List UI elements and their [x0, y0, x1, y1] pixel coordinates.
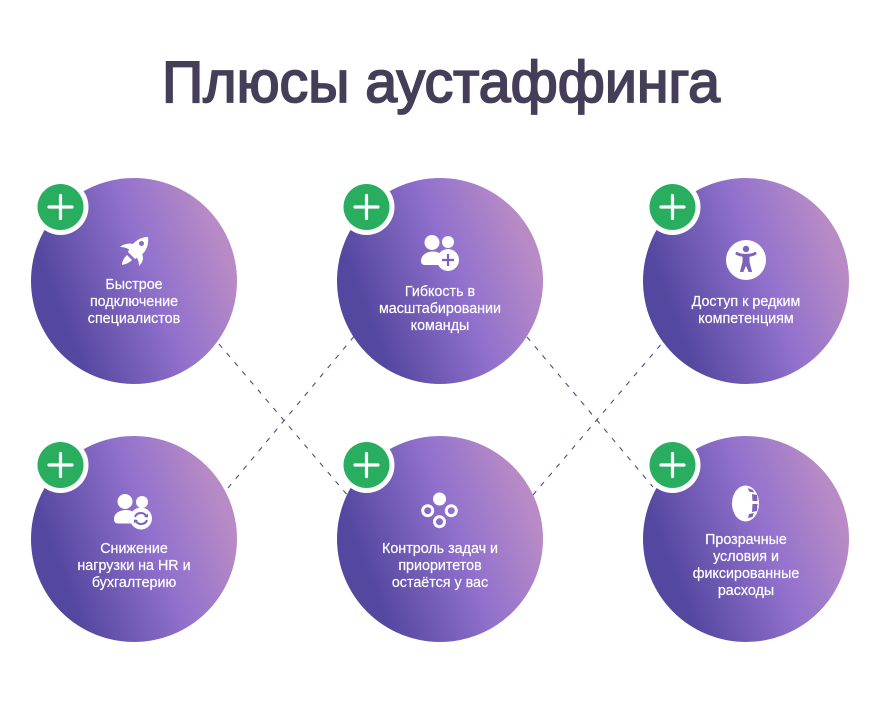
text: scaling flexibility: Гибкость в — [405, 284, 475, 300]
dashed connector lines — [219, 334, 663, 497]
panel: fast onboarding — [31, 178, 237, 384]
text: fast onboarding: подключение — [90, 294, 178, 310]
text: transparent costs: условия и — [713, 549, 779, 565]
text: rare competencies: Доступ к редким — [692, 294, 800, 310]
text: fast onboarding: специалистов — [88, 311, 180, 327]
icon: accessibility figure — [726, 240, 766, 280]
text: reduced HR load: бухгалтерию — [92, 575, 176, 591]
text: transparent costs: расходы — [718, 583, 774, 599]
text: task control: приоритетов — [398, 558, 482, 574]
icon: plus badge — [32, 179, 88, 235]
text: scaling flexibility: команды — [411, 318, 469, 334]
title: Плюсы аустаффинга — [162, 50, 721, 115]
icon: plus badge — [644, 437, 700, 493]
text: rare competencies: компетенциям — [698, 311, 794, 327]
icon: four dots — [423, 494, 456, 527]
panel: reduced HR load — [31, 436, 237, 642]
text: reduced HR load: Снижение — [100, 541, 168, 557]
icon: rocket — [120, 237, 148, 266]
icon: plus badge — [644, 179, 700, 235]
panel: rare competencies — [643, 178, 849, 384]
panel: transparent costs — [643, 436, 849, 642]
icon: plus badge — [32, 437, 88, 493]
icon: coin — [732, 486, 759, 522]
panel: task control — [337, 436, 543, 642]
icon: people with refresh — [114, 494, 152, 530]
icon: people with plus — [421, 235, 459, 271]
icon: plus badge — [338, 437, 394, 493]
text: task control: Контроль задач и — [382, 541, 498, 557]
text: scaling flexibility: масштабировании — [379, 301, 501, 317]
text: transparent costs: Прозрачные — [705, 532, 787, 548]
text: task control: остаётся у вас — [392, 575, 488, 591]
icon: plus badge — [338, 179, 394, 235]
text: reduced HR load: нагрузки на HR и — [77, 558, 191, 574]
text: transparent costs: фиксированные — [693, 566, 799, 582]
text: fast onboarding: Быстрое — [105, 277, 163, 293]
panel: scaling flexibility — [337, 178, 543, 384]
